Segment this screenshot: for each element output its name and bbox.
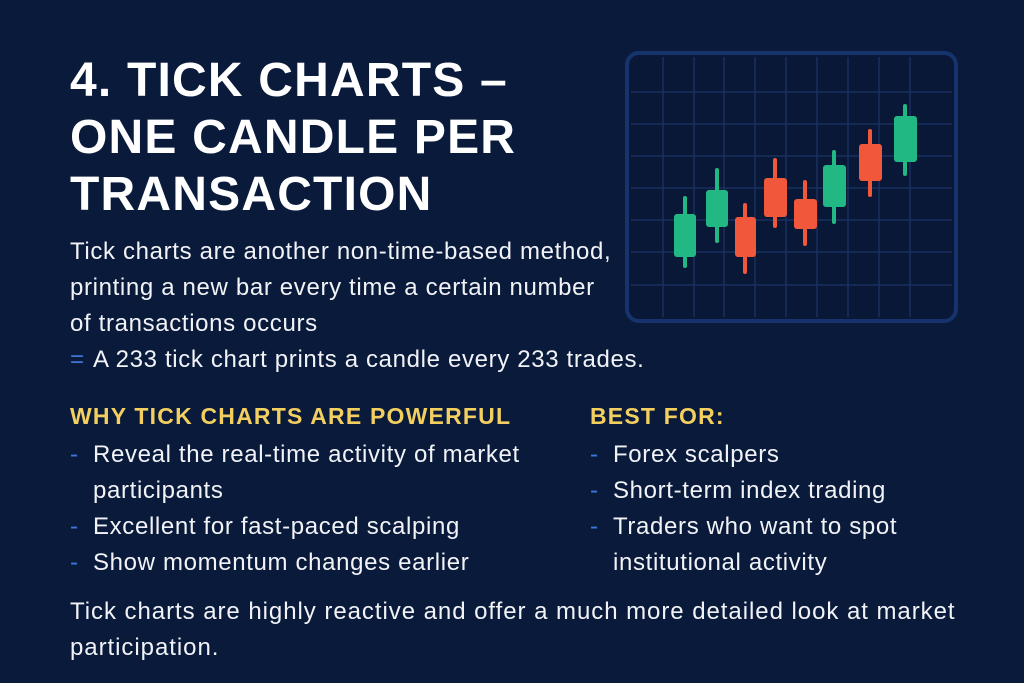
bullet list: why powerful: - <box>70 549 79 576</box>
bullet list: why powerful: Show momentum changes earlier <box>93 549 469 576</box>
closing text: Tick charts are highly reactive and offer a much more detailed look at market <box>70 598 956 625</box>
bullet list: why powerful: participants <box>93 477 224 504</box>
bullet list: why powerful: Excellent for fast-paced scalping <box>93 513 460 540</box>
heading: best for: BEST FOR: <box>590 403 725 429</box>
bullet list: best for: - <box>590 441 599 468</box>
title: TRANSACTION <box>70 168 433 221</box>
title: ONE CANDLE PER <box>70 111 516 164</box>
bullet list: best for: Short-term index trading <box>613 477 886 504</box>
bullet list: why powerful: - <box>70 513 79 540</box>
bullet list: best for <box>590 441 897 576</box>
panel: best for <box>590 403 897 576</box>
title: 4. TICK CHARTS – <box>70 54 508 107</box>
panel: why powerful <box>70 403 520 576</box>
chart: candlestick panel <box>625 51 958 323</box>
intro text: A 233 tick chart prints a candle every 233 trades. <box>93 346 644 373</box>
bullet list: best for: Traders who want to spot <box>613 513 897 540</box>
bullet list: best for: - <box>590 477 599 504</box>
bullet list: why powerful: Reveal the real-time activity of market <box>93 441 520 468</box>
intro text <box>70 238 644 373</box>
title <box>70 54 516 221</box>
bullet list: best for: - <box>590 513 599 540</box>
heading: why powerful: WHY TICK CHARTS ARE POWERFUL <box>70 403 511 429</box>
bullet list: why powerful <box>70 441 520 576</box>
bullet list: best for: institutional activity <box>613 549 827 576</box>
closing text: participation. <box>70 634 219 661</box>
closing text <box>70 598 956 661</box>
intro text: printing a new bar every time a certain number <box>70 274 595 301</box>
intro text: = <box>70 346 85 373</box>
intro text: Tick charts are another non-time-based method, <box>70 238 611 265</box>
bullet list: why powerful: - <box>70 441 79 468</box>
bullet list: best for: Forex scalpers <box>613 441 779 468</box>
intro text: of transactions occurs <box>70 310 318 337</box>
